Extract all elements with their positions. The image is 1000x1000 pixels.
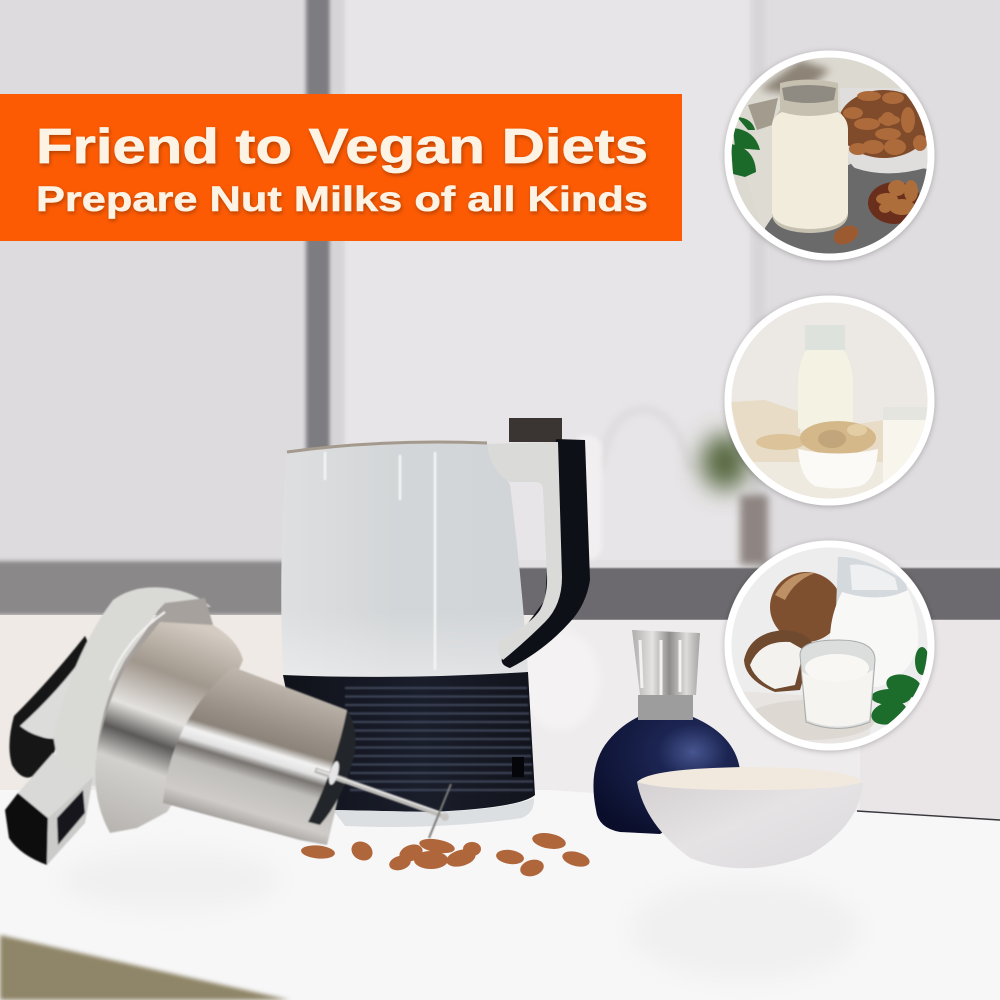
subheading: Prepare Nut Milks of all Kinds	[36, 180, 648, 219]
white bowl	[798, 449, 878, 488]
leaves	[869, 647, 929, 728]
counter and back splash	[0, 615, 1000, 1000]
black handle arm	[9, 636, 92, 778]
milk bottle	[798, 325, 853, 434]
glass jug of milk	[830, 557, 918, 687]
jug body	[281, 442, 528, 677]
background: blurred kitchen wall	[0, 0, 1000, 620]
coconut half shell	[744, 630, 813, 692]
icon: leaves	[731, 117, 760, 177]
milk glass	[800, 640, 875, 728]
ghost lid behind handle	[520, 630, 600, 730]
white bowl	[637, 767, 863, 868]
cashews	[756, 421, 876, 455]
handle	[487, 418, 590, 668]
bottle of milk	[772, 80, 848, 233]
steel disc	[96, 598, 214, 833]
coconut	[770, 572, 842, 642]
blue vase	[593, 630, 740, 834]
removed blender head	[5, 587, 451, 865]
title banner	[0, 94, 682, 241]
steel cylinder	[163, 667, 351, 845]
almond dish	[868, 180, 922, 224]
almond bowl	[838, 88, 935, 173]
ribbed cylinder end	[308, 710, 355, 825]
power connector arm	[5, 753, 93, 865]
single almond	[834, 226, 858, 244]
steel body flange	[95, 622, 243, 833]
coconut flakes	[745, 700, 875, 740]
photo circle: cashew milk	[724, 295, 935, 512]
ribbed base	[283, 672, 535, 827]
almonds	[300, 831, 591, 879]
photo circle: almond milk	[724, 50, 935, 260]
white ring	[53, 587, 211, 787]
glass of milk	[883, 407, 928, 482]
blade shaft	[315, 760, 451, 838]
photo circle: coconut milk	[724, 540, 935, 760]
blender jug	[281, 418, 602, 827]
heading: Friend to Vegan Diets	[36, 119, 648, 174]
